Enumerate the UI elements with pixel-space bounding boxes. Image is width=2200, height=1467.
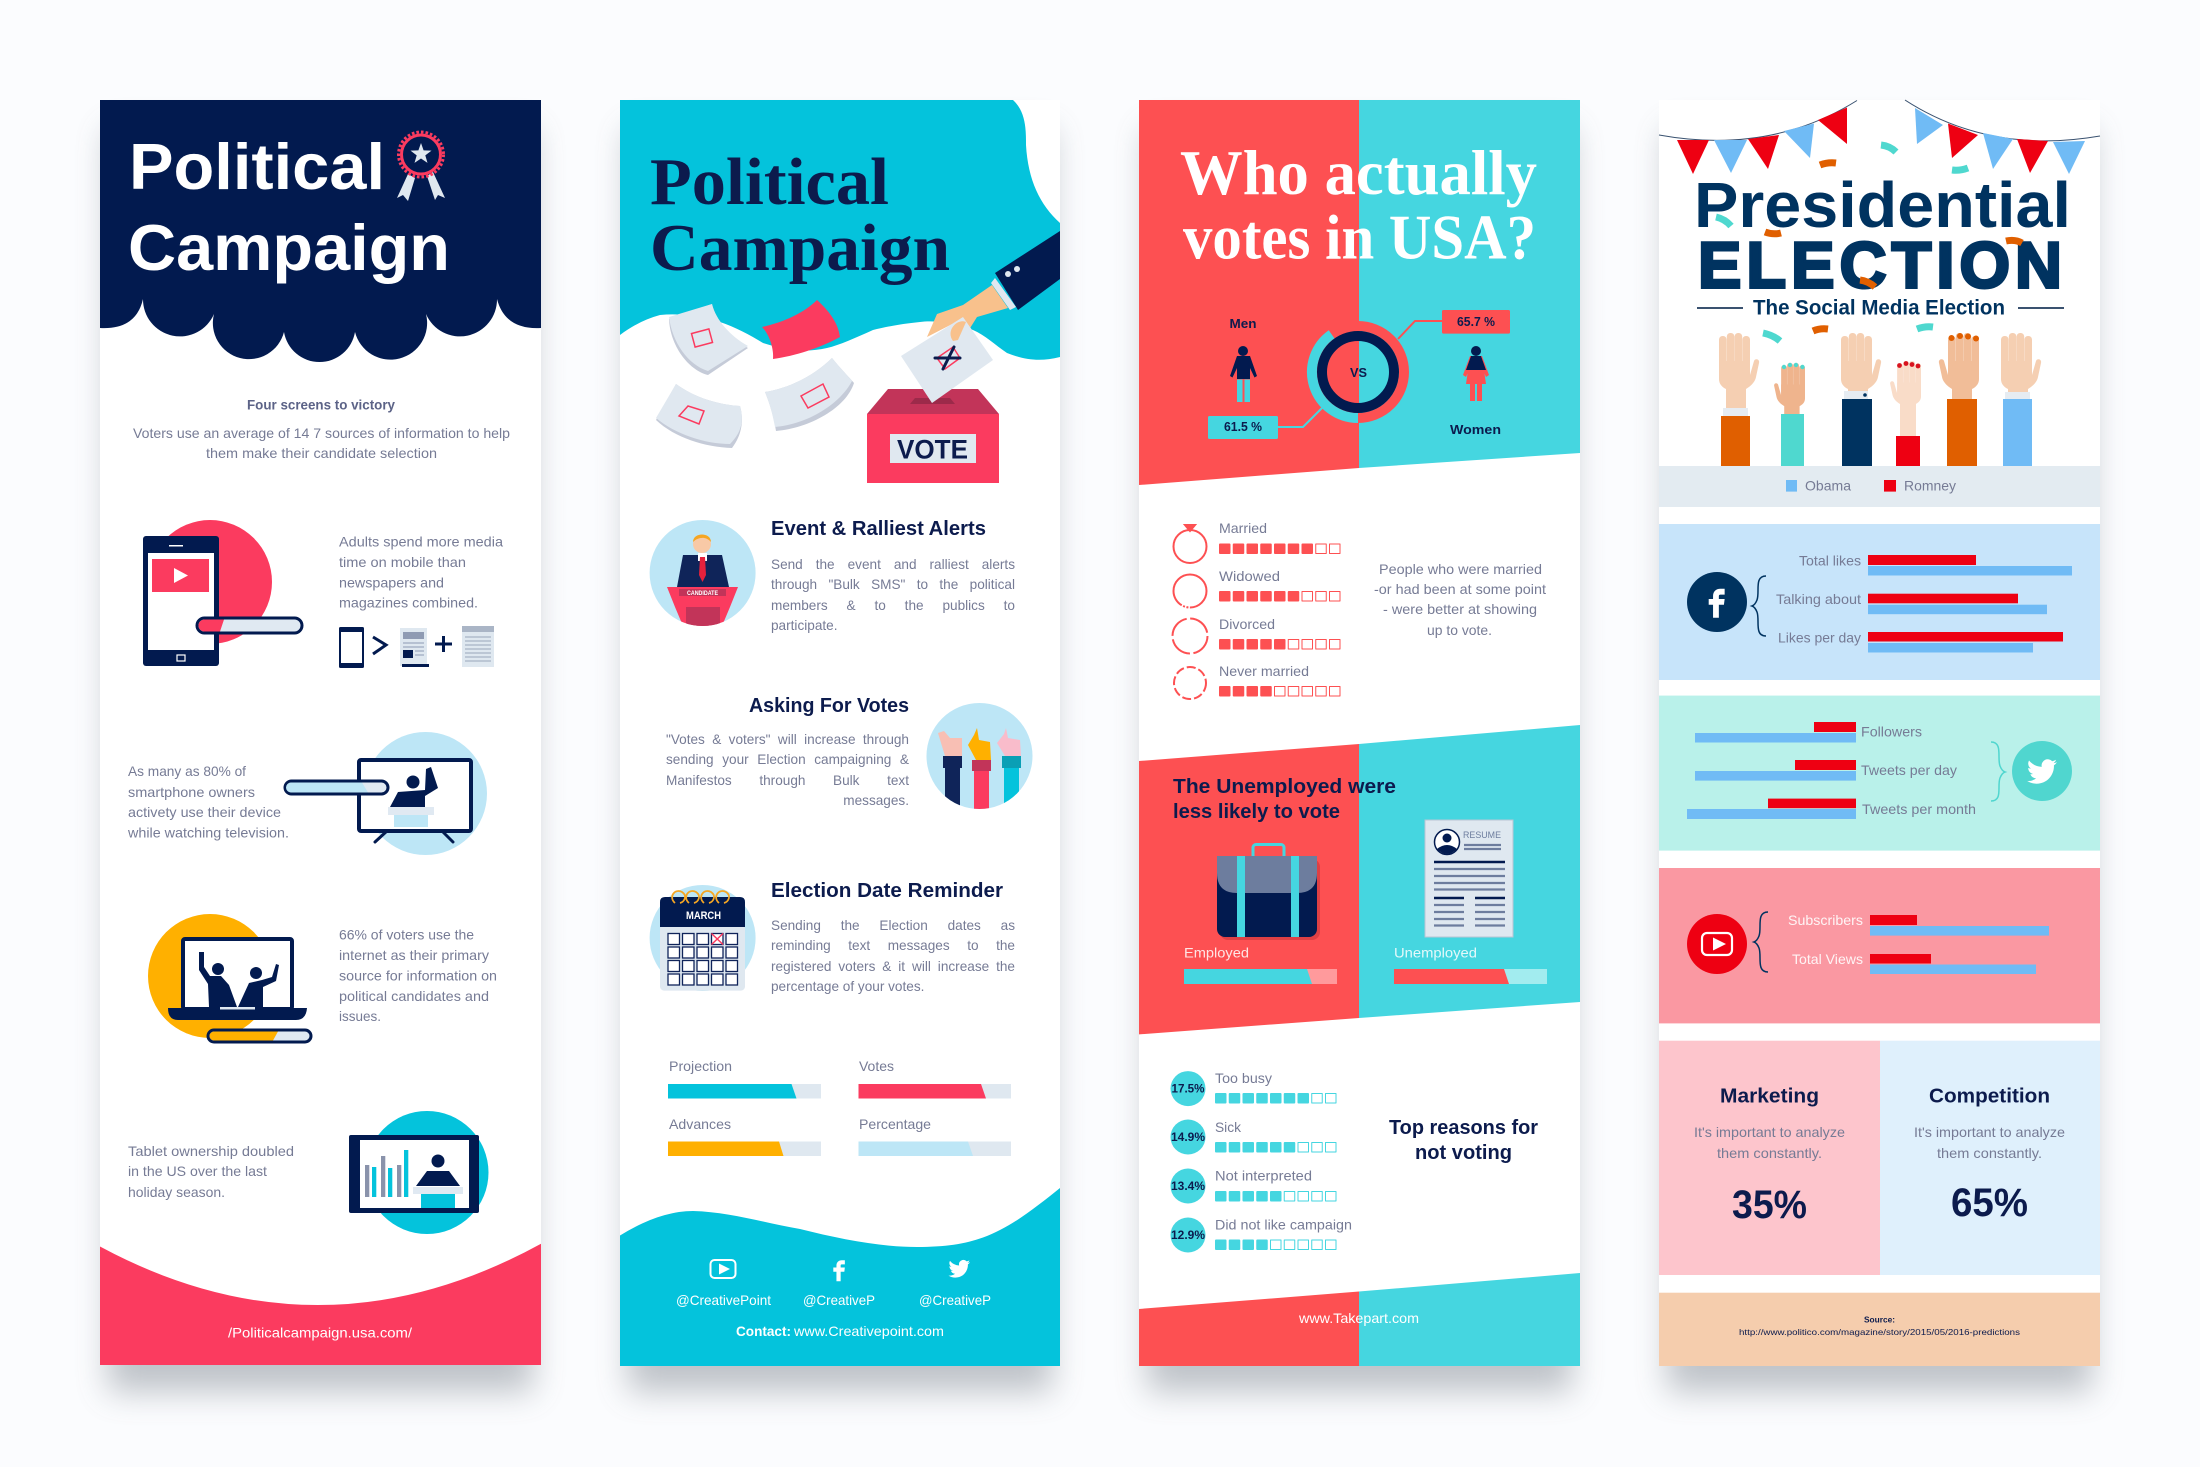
icon: raised hands	[926, 703, 1032, 815]
icon: phone greater than newspaper plus magazine	[339, 626, 494, 668]
text: internet voters	[339, 927, 497, 1024]
text: smartphone owners	[127, 763, 289, 840]
reasons for not voting ratings	[1170, 1070, 1352, 1252]
section: event alerts: through "Bulk SMS" to the political	[771, 577, 1015, 592]
icon: tablet with chart	[349, 1111, 488, 1234]
section: asking for votes: messages.	[843, 793, 909, 808]
section: election date: Election Date Reminder	[771, 880, 1003, 902]
section: facebook	[1659, 524, 2100, 680]
section: event alerts: participate.	[771, 618, 838, 633]
chart: progress bars: Advances	[669, 1116, 731, 1132]
footer text: /Politicalcampaign.usa.com/	[228, 1324, 412, 1340]
card: competition: 65%	[1951, 1181, 2028, 1225]
text: mobile media: magazines combined.	[339, 594, 478, 610]
icon: resume: RESUME	[1463, 830, 1501, 841]
text: internet voters: source for information on	[339, 967, 497, 983]
text: married voters note: People who were married	[1379, 561, 1542, 577]
intro text	[133, 398, 510, 461]
icon: candidate at podium: CANDIDATE	[687, 591, 718, 597]
heading: top reasons: Top reasons for	[1389, 1117, 1538, 1139]
reasons for not voting ratings: Did not like campaign	[1215, 1216, 1352, 1232]
section: election date	[650, 880, 1015, 1000]
text: internet voters: 66% of voters use the	[339, 927, 474, 943]
panel: who votes	[1139, 100, 1580, 1366]
text: married voters note: -or had been at some point	[1374, 581, 1546, 597]
text: smartphone owners: smartphone owners	[128, 784, 255, 800]
section: event alerts: Send the event and ralliest alerts	[771, 557, 1015, 572]
background: top red and teal split	[1139, 100, 1580, 485]
source footer: Source:	[1864, 1315, 1895, 1325]
card: competition: them constantly.	[1937, 1145, 2042, 1161]
panel: political campaign teal	[620, 100, 1060, 1366]
reasons for not voting ratings: 12.9%	[1171, 1228, 1205, 1242]
text: smartphone owners: As many as 80% of	[128, 763, 246, 779]
text: mobile media	[339, 534, 503, 610]
reasons for not voting ratings: Not interpreted	[1215, 1168, 1312, 1184]
text: mobile media: newspapers and	[339, 574, 444, 590]
social handles: @CreativePoint	[676, 1292, 771, 1308]
section: twitter	[1659, 696, 2100, 851]
chart: progress bars: Projection	[669, 1058, 732, 1074]
card: competition: It's important to analyze	[1914, 1124, 2065, 1140]
intro text: Four screens to victory	[247, 398, 395, 412]
section: asking for votes: "Votes & voters" will increase through	[666, 732, 909, 747]
section: twitter: Followers	[1861, 724, 1922, 740]
text: tablet ownership: holiday season.	[128, 1184, 225, 1200]
text: smartphone owners: while watching television.	[127, 824, 289, 840]
chart: men vs women donut: VS	[1350, 365, 1367, 380]
card: competition	[1880, 1041, 2100, 1275]
panel: presidential election	[1659, 100, 2100, 1366]
section: asking for votes	[666, 695, 1032, 815]
section: youtube: Total Views	[1792, 951, 1863, 967]
section: election date: reminding text messages to the	[771, 938, 1015, 953]
section: election date: percentage of your votes.	[771, 979, 924, 994]
title: The Social Media Election	[1753, 296, 2005, 320]
source footer	[1659, 1293, 2100, 1366]
icon: calendar	[650, 885, 756, 991]
legend: Romney	[1904, 478, 1956, 494]
footer: red curved band	[100, 1244, 541, 1365]
text: internet voters: internet as their primary	[339, 947, 489, 963]
reasons for not voting ratings: Sick	[1215, 1119, 1242, 1135]
intro text: Voters use an average of 14 7 sources of information to help	[133, 425, 510, 441]
title: Campaign	[128, 211, 450, 284]
contact line: www.Creativepoint.com	[793, 1323, 944, 1339]
chart: progress bars: Percentage	[859, 1116, 931, 1132]
social handles: @CreativeP	[803, 1292, 875, 1308]
card: marketing: them constantly.	[1717, 1145, 1822, 1161]
card: marketing: Marketing	[1720, 1086, 1819, 1108]
men label and icon: Men	[1230, 316, 1257, 331]
chart: progress bars: Votes	[859, 1058, 894, 1074]
title: Campaign	[650, 211, 950, 285]
bars: employed and unemployed: Unemployed	[1394, 945, 1477, 961]
icon: youtube outline	[710, 1260, 736, 1278]
reasons for not voting ratings: 13.4%	[1171, 1179, 1205, 1193]
women label and icon	[1442, 310, 1510, 437]
icon: briefcase	[1217, 844, 1320, 940]
legend	[1659, 466, 2100, 507]
icon: twitter	[2012, 741, 2072, 801]
card: marketing	[1659, 1041, 1880, 1275]
section: facebook: Likes per day	[1778, 630, 1861, 646]
section: election date: Sending the Election dates as	[771, 918, 1015, 933]
text: tablet ownership	[128, 1143, 294, 1200]
icon: facebook	[1687, 572, 1747, 632]
section: asking for votes: sending your Election campaigning &	[666, 752, 909, 767]
icon: tv with speaker	[285, 732, 487, 855]
heading: unemployed: The Unemployed were	[1173, 776, 1396, 798]
reasons for not voting ratings: 17.5%	[1172, 1082, 1205, 1096]
marital status ratings: Widowed	[1219, 568, 1280, 584]
heading: top reasons	[1389, 1117, 1538, 1164]
text: internet voters: issues.	[339, 1008, 381, 1024]
text: mobile media: time on mobile than	[339, 554, 466, 570]
heading: top reasons: not voting	[1415, 1142, 1512, 1164]
section: event alerts: Event & Ralliest Alerts	[771, 518, 986, 540]
footer band	[1139, 1273, 1580, 1366]
section: election date: registered voters & it will increase the	[771, 959, 1015, 974]
illustration: raised hands	[1719, 333, 2041, 466]
women label and icon: 65.7 %	[1457, 314, 1495, 329]
text: internet voters: political candidates and	[339, 988, 489, 1004]
text: tablet ownership: Tablet ownership doubled	[128, 1143, 294, 1159]
section: asking for votes: Manifestos through Bulk text	[666, 773, 909, 788]
women label and icon: Women	[1450, 422, 1501, 437]
section: event alerts	[650, 518, 1015, 639]
marital status ratings: Never married	[1219, 663, 1309, 679]
bunting	[1659, 100, 2100, 174]
header: teal wave	[620, 100, 1060, 360]
text: smartphone owners: activety use their device	[128, 804, 281, 820]
footer text: www.Takepart.com	[1298, 1310, 1419, 1326]
section: facebook: Total likes	[1799, 552, 1861, 568]
title: Presidential	[1694, 169, 2071, 241]
section: twitter: Tweets per day	[1861, 762, 1957, 778]
card: marketing: It's important to analyze	[1694, 1124, 1845, 1140]
icon: resume	[1425, 820, 1513, 937]
text: mobile media: Adults spend more media	[339, 534, 503, 550]
title	[650, 145, 950, 285]
reasons for not voting ratings: 14.9%	[1171, 1130, 1205, 1144]
bars: employed and unemployed	[1184, 945, 1547, 984]
card: marketing: 35%	[1732, 1183, 1807, 1227]
legend: Obama	[1805, 478, 1851, 494]
title: Political	[650, 145, 889, 219]
text: married voters note: up to vote.	[1427, 622, 1492, 638]
card: competition: Competition	[1929, 1086, 2050, 1108]
chart: progress bars	[668, 1058, 1011, 1156]
panel: political campaign navy	[100, 100, 541, 1365]
men label and icon	[1208, 316, 1278, 439]
social handles	[676, 1292, 991, 1308]
heading: unemployed: less likely to vote	[1173, 801, 1340, 823]
confetti	[1716, 145, 2022, 341]
marital status ratings	[1172, 520, 1340, 699]
header: navy scalloped banner	[100, 100, 541, 362]
section: youtube: Subscribers	[1788, 912, 1863, 928]
section: event alerts: members & to the publics to	[771, 598, 1015, 613]
men label and icon: 61.5 %	[1224, 419, 1262, 434]
source footer: http://www.politico.com/magazine/story/2015/05/2016-predictions	[1739, 1327, 2020, 1337]
contact line: Contact:	[736, 1323, 791, 1339]
section: twitter: Tweets per month	[1862, 801, 1976, 817]
title: Political	[129, 130, 385, 203]
icon: phone with video	[143, 520, 302, 666]
illustration: ballots and vote box: VOTE	[897, 435, 968, 465]
icon: twitter bird	[948, 1260, 970, 1278]
title: ELECTION	[1698, 229, 2062, 302]
icon: youtube	[1687, 914, 1747, 974]
marital status ratings: Married	[1219, 520, 1267, 536]
illustration: ballots and vote box	[656, 231, 1060, 483]
icon: never married ring	[1174, 667, 1206, 699]
icon: married ring	[1174, 525, 1206, 563]
text: married voters note: - were better at showing	[1383, 601, 1537, 617]
title: votes in USA?	[1183, 202, 1536, 273]
title	[1180, 137, 1537, 273]
section: youtube	[1659, 868, 2100, 1023]
title: Who actually	[1180, 137, 1537, 208]
social handles: @CreativeP	[919, 1292, 991, 1308]
text: married voters note	[1374, 561, 1546, 638]
band: unemployment split	[1139, 725, 1580, 1034]
chart: men vs women donut	[1278, 321, 1442, 427]
section: asking for votes: Asking For Votes	[749, 695, 909, 717]
section: facebook: Talking about	[1776, 591, 1861, 607]
icon: rosette	[397, 132, 445, 201]
icon: facebook f	[833, 1260, 845, 1281]
footer: teal wave	[620, 1188, 1060, 1366]
icon: widowed ring	[1174, 574, 1206, 608]
bars: employed and unemployed: Employed	[1184, 945, 1249, 961]
icon: calendar: MARCH	[686, 910, 721, 922]
intro text: them make their candidate selection	[206, 445, 437, 461]
icon: candidate at podium	[650, 520, 756, 627]
text: tablet ownership: in the US over the last	[128, 1163, 267, 1179]
icon: divorced ring	[1172, 618, 1208, 654]
marital status ratings: Divorced	[1219, 616, 1275, 632]
icon: laptop with candidates	[148, 914, 311, 1042]
title	[1694, 169, 2071, 320]
reasons for not voting ratings: Too busy	[1215, 1070, 1272, 1086]
title	[128, 130, 450, 284]
heading: unemployed	[1173, 776, 1396, 823]
